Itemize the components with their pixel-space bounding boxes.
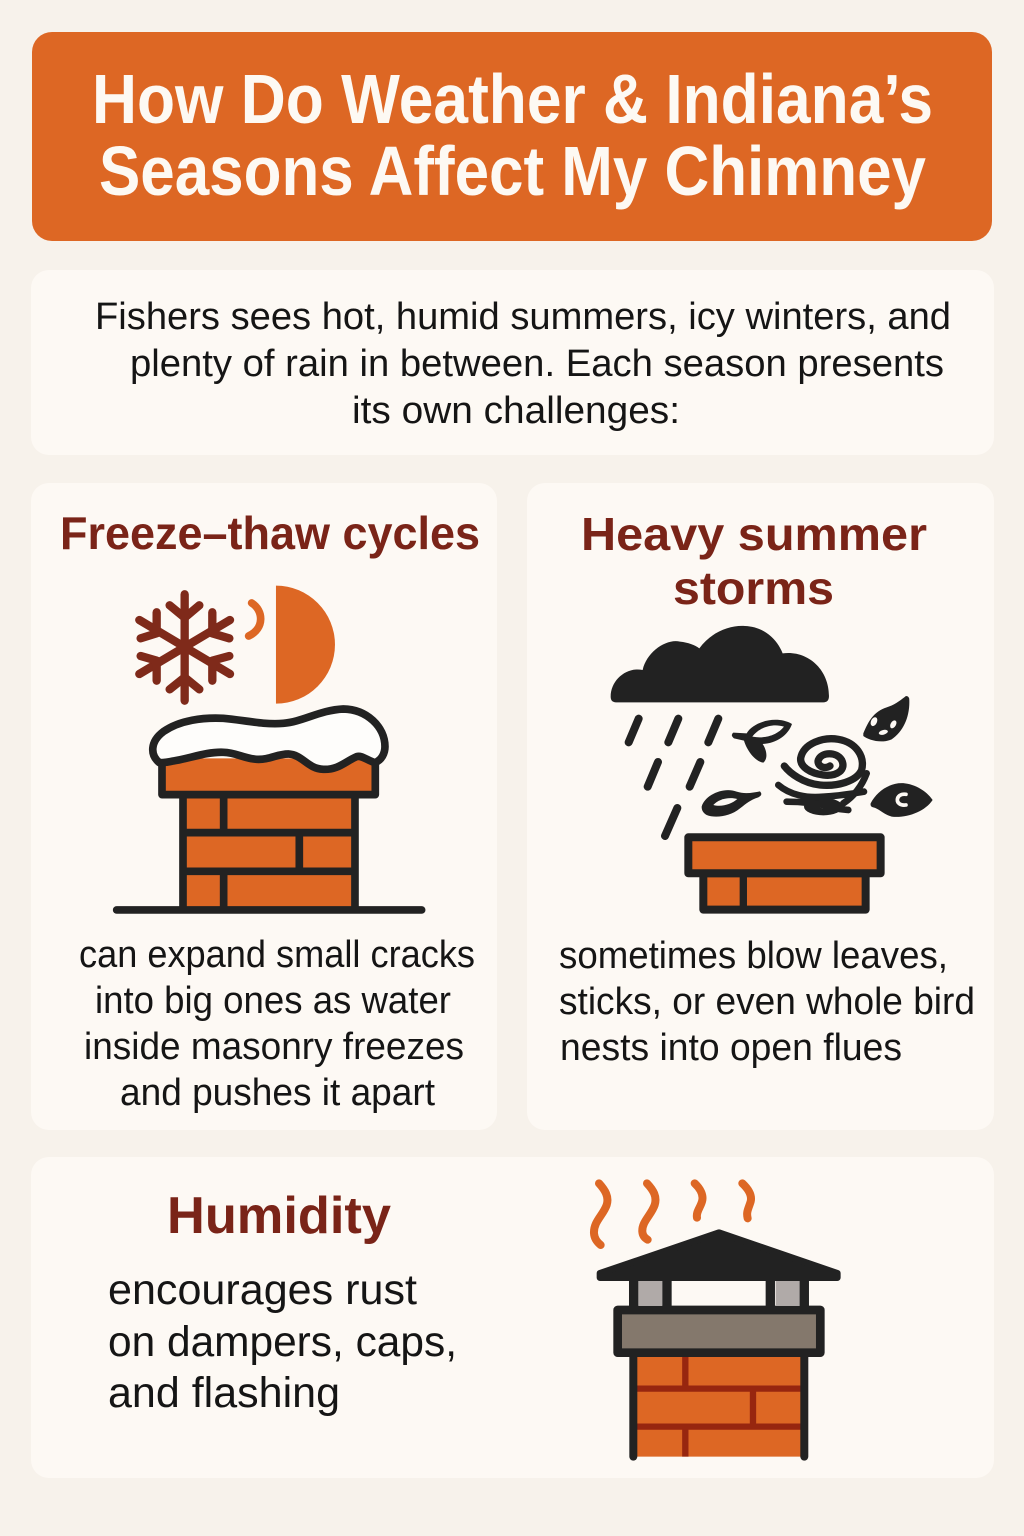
text: storms description	[559, 935, 975, 1069]
text: freeze-thaw description	[79, 934, 475, 1114]
text: storms description: nests into open flues	[560, 1027, 902, 1069]
heading: heavy summer storms	[581, 508, 927, 614]
text: freeze-thaw description: and pushes it apart	[120, 1072, 435, 1114]
text: humidity description	[108, 1266, 457, 1417]
text: freeze-thaw description: into big ones as water	[95, 980, 451, 1022]
icon: snowflake	[139, 594, 230, 701]
icon: snow-capped chimney	[117, 709, 422, 910]
title banner	[32, 32, 992, 241]
panel: intro: plenty of rain in between. Each season presents	[130, 343, 944, 385]
heading: heavy summer storms: Heavy summer	[581, 508, 927, 560]
text: humidity description: and flashing	[108, 1369, 340, 1417]
text: humidity description: on dampers, caps,	[108, 1318, 457, 1366]
text: freeze-thaw description: inside masonry freezes	[84, 1026, 464, 1068]
icon: storm cloud	[611, 626, 829, 702]
text: freeze-thaw description: can expand small cracks	[79, 934, 475, 976]
icon: wind and leaves	[702, 696, 933, 817]
panel: humidity	[31, 1157, 994, 1478]
icon: rising moisture	[594, 1183, 751, 1245]
icon: open chimney top	[688, 837, 881, 910]
panel: intro: its own challenges:	[352, 390, 680, 432]
text: storms description: sometimes blow leaves,	[559, 935, 948, 977]
text: humidity description: encourages rust	[108, 1266, 417, 1314]
panel: freeze-thaw cycles	[31, 483, 497, 1130]
text: storms description: sticks, or even whole bird	[559, 981, 975, 1023]
panel: intro	[31, 270, 994, 455]
panel: intro: Fishers sees hot, humid summers, icy winters, and	[95, 296, 951, 338]
title banner: Seasons Affect My Chimney	[99, 132, 926, 210]
title banner: How Do Weather & Indiana’s	[92, 60, 933, 138]
icon: rain	[629, 719, 718, 836]
heading: heavy summer storms: storms	[673, 562, 834, 614]
icon: half sun	[249, 586, 335, 704]
panel: heavy summer storms	[527, 483, 994, 1130]
heading: freeze-thaw cycles: Freeze–thaw cycles	[60, 507, 480, 559]
heading: humidity: Humidity	[167, 1187, 391, 1245]
icon: capped chimney	[600, 1233, 837, 1457]
